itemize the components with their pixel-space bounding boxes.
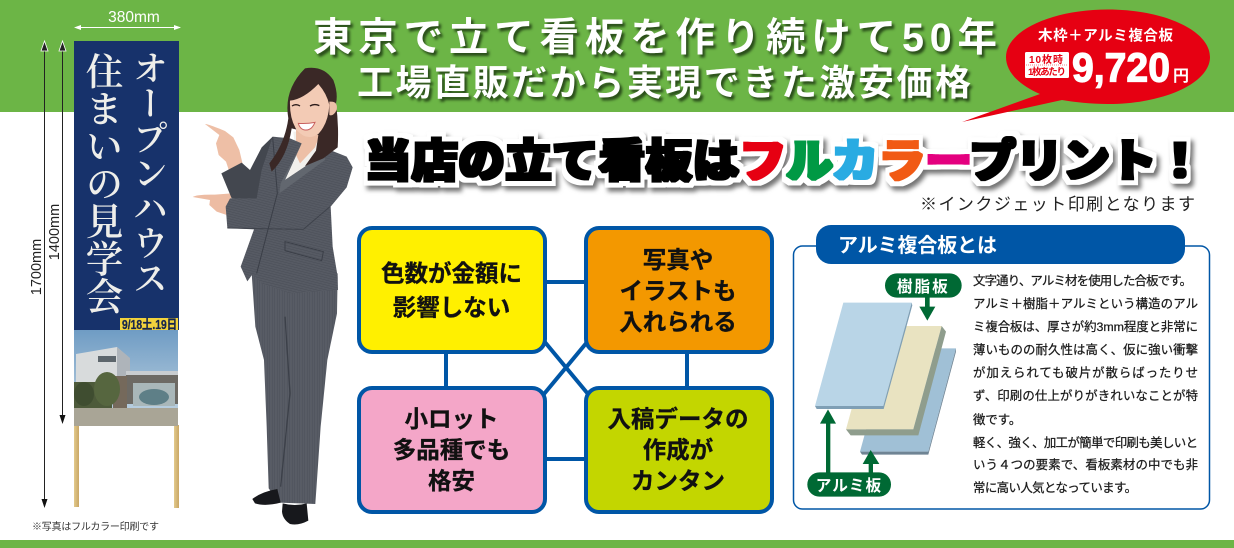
panel body text: 軽く、強く、加工が簡単で印刷も美しいと — [973, 435, 1198, 450]
connector lines — [446, 282, 687, 459]
feature: photos and illustrations: 写真や — [643, 247, 713, 273]
jacket — [226, 137, 353, 293]
per-unit tag: 1枚あたり — [1028, 66, 1066, 78]
height dimension 1700mm: 1700mm — [29, 239, 45, 295]
per-unit tag: 10枚時 — [1029, 53, 1063, 66]
height dimension 1700mm — [29, 41, 48, 508]
panel body text: ミ複合板は、厚さが約3mm程度と非常に — [973, 319, 1198, 334]
panel body text: ず、印刷の仕上がりがきれいなことが特 — [973, 388, 1198, 403]
panel body text: 徴です。 — [973, 413, 1021, 427]
sub heading: 当店の立て看板はフルカラープリント！ — [365, 135, 1203, 187]
feature: colours do not affect price: 色数が金額に — [381, 260, 522, 286]
signboard illustration — [74, 41, 179, 508]
panel body text — [973, 273, 1198, 495]
hair — [269, 68, 338, 172]
per-unit tag — [1025, 52, 1069, 78]
panel body text: 文字通り、アルミ材を使用した合板です。 — [973, 273, 1192, 288]
photo caption: ※写真はフルカラー印刷です — [32, 520, 159, 533]
panel title: アルミ複合板とは — [838, 234, 997, 257]
panel body text: 薄いものの耐久性は高く、仮に強い衝撃 — [973, 342, 1198, 357]
yen unit: 円 — [1173, 68, 1189, 85]
arrows — [820, 295, 935, 475]
feature: colours do not affect price — [359, 228, 545, 352]
layered board diagram — [807, 273, 962, 497]
panel body text: 常に高い人気となっています。 — [973, 480, 1137, 495]
shoes — [252, 489, 308, 525]
label: aluminium: アルミ板 — [816, 477, 882, 495]
main heading line 1: 東京で立て看板を作り続けて50年 — [313, 16, 997, 60]
wooden posts — [74, 425, 179, 508]
feature: small lots: 小ロット — [404, 406, 498, 432]
label: resin: 樹脂板 — [897, 277, 950, 296]
panel title — [816, 225, 1185, 264]
top green band — [0, 0, 1234, 112]
panel: aluminium composite board — [794, 225, 1210, 509]
feature: easy data creation — [586, 388, 772, 512]
feature: photos and illustrations: 入れられる — [619, 309, 737, 335]
upper hand — [205, 124, 243, 172]
resin layer — [846, 326, 946, 435]
feature: photos and illustrations — [586, 228, 772, 352]
face — [290, 84, 329, 137]
trousers — [252, 273, 338, 504]
bubble shape — [962, 10, 1210, 122]
height dimension 1400mm: 1400mm — [47, 204, 63, 260]
bubble product label: 木枠＋アルミ複合板 — [1038, 28, 1174, 44]
upper sleeve — [221, 137, 277, 200]
feature diagram — [359, 228, 772, 512]
label: resin — [885, 273, 962, 298]
back aluminium layer — [860, 348, 956, 455]
lower hand — [193, 193, 232, 215]
panel body text: が加えられても破片が散らばったりせ — [973, 365, 1198, 380]
feature: easy data creation: 作成が — [643, 436, 714, 463]
sign headline: open house: オープンハウス — [128, 50, 168, 295]
figure: businesswoman pointing — [193, 68, 353, 525]
feature: colours do not affect price: 影響しない — [393, 294, 510, 320]
sign headline: viewing event: 住まいの見学会 — [80, 52, 123, 317]
feature: small lots — [359, 388, 545, 512]
panel frame — [794, 246, 1210, 509]
inkjet note: ※インクジェット印刷となります — [920, 195, 1195, 214]
sign date strip: 9/18土.19日 — [122, 317, 177, 332]
feature: small lots: 多品種でも — [393, 437, 510, 463]
feature: photos and illustrations: イラストも — [619, 278, 737, 304]
panel body text: いう４つの要素で、看板素材の中でも非 — [973, 457, 1198, 472]
facial features — [292, 105, 319, 130]
price bubble — [962, 10, 1210, 122]
price: 9,720 — [1072, 44, 1170, 90]
panel body text: アルミ＋樹脂＋アルミという構造のアル — [973, 296, 1198, 311]
sign navy panel — [74, 41, 179, 330]
height dimension 1400mm — [47, 41, 66, 424]
feature: easy data creation: カンタン — [631, 468, 725, 494]
width arrow — [74, 25, 181, 30]
feature: easy data creation: 入稿データの — [608, 405, 748, 432]
bottom green band — [0, 540, 1234, 548]
width dimension — [74, 9, 181, 30]
front aluminium layer — [815, 303, 912, 409]
sign house photo — [74, 330, 178, 426]
label: aluminium — [807, 472, 891, 497]
neck and blouse — [285, 132, 322, 181]
lapel — [279, 143, 325, 193]
main heading line 2: 工場直販だから実現できた激安価格 — [357, 62, 971, 103]
dimension label 380mm: 380mm — [108, 9, 160, 26]
feature: small lots: 格安 — [428, 468, 475, 494]
